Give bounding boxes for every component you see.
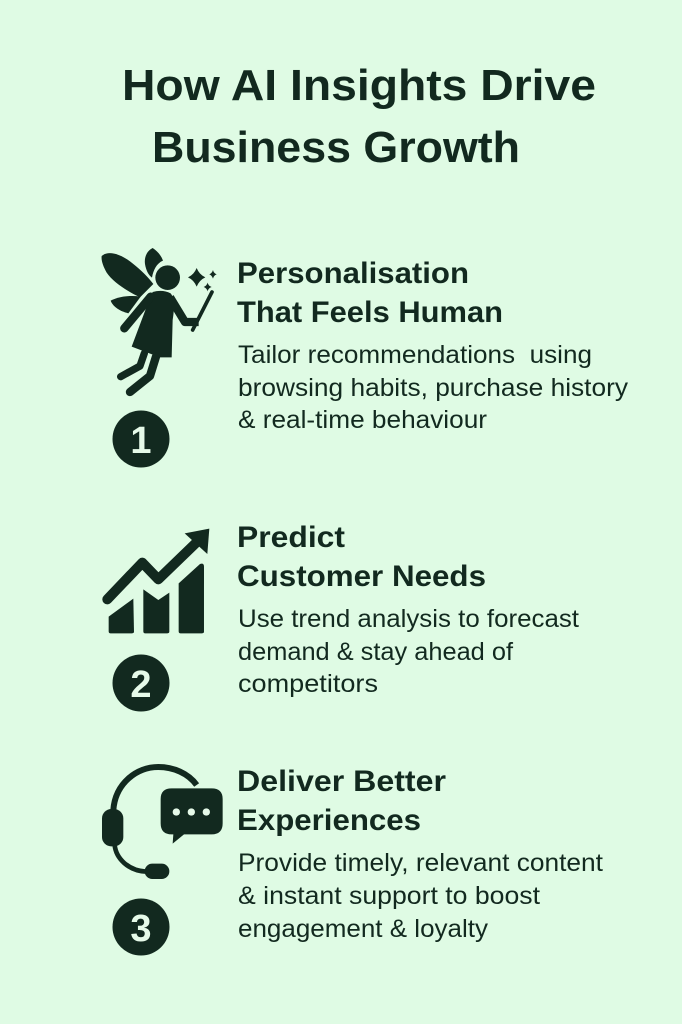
number badge 3: 3 bbox=[130, 908, 152, 950]
text block: experiences: Provide timely, relevant content bbox=[238, 849, 603, 877]
heading: predict: Customer Needs bbox=[237, 560, 486, 593]
title bbox=[122, 61, 596, 172]
text block: predict bbox=[238, 605, 579, 698]
heading: experiences bbox=[237, 765, 446, 837]
heading: personalisation bbox=[237, 257, 503, 329]
number badge 1: 1 bbox=[130, 420, 152, 462]
text block: experiences: engagement & loyalty bbox=[238, 915, 489, 943]
text block: experiences bbox=[238, 849, 603, 943]
heading: experiences: Deliver Better bbox=[237, 765, 446, 798]
icon: growth chart with arrow bbox=[107, 529, 209, 633]
title: How AI Insights Drive bbox=[122, 61, 596, 110]
text block: personalisation bbox=[238, 341, 629, 434]
heading: predict bbox=[237, 521, 486, 593]
number badge 2: 2 bbox=[130, 664, 152, 706]
icon: headset with chat bubble bbox=[102, 767, 223, 879]
number badge 3 bbox=[112, 898, 170, 956]
heading: personalisation: Personalisation bbox=[237, 257, 469, 290]
text block: personalisation: Tailor recommendations using bbox=[238, 341, 592, 369]
heading: predict: Predict bbox=[237, 521, 345, 554]
text block: experiences: & instant support to boost bbox=[238, 882, 540, 910]
heading: experiences: Experiences bbox=[237, 804, 421, 837]
text block: personalisation: browsing habits, purchase history bbox=[238, 374, 629, 402]
title: Business Growth bbox=[152, 123, 520, 172]
panel: experiences bbox=[102, 765, 603, 956]
text block: predict: competitors bbox=[238, 670, 378, 698]
text block: predict: demand & stay ahead of bbox=[238, 638, 513, 666]
text block: predict: Use trend analysis to forecast bbox=[238, 605, 579, 633]
icon: fairy with wand bbox=[102, 248, 217, 392]
number badge 2 bbox=[112, 654, 170, 712]
number badge 1 bbox=[112, 410, 170, 468]
heading: personalisation: That Feels Human bbox=[237, 296, 503, 329]
text block: personalisation: & real-time behaviour bbox=[238, 406, 487, 434]
panel: personalisation bbox=[102, 248, 629, 468]
panel: predict bbox=[107, 521, 579, 712]
